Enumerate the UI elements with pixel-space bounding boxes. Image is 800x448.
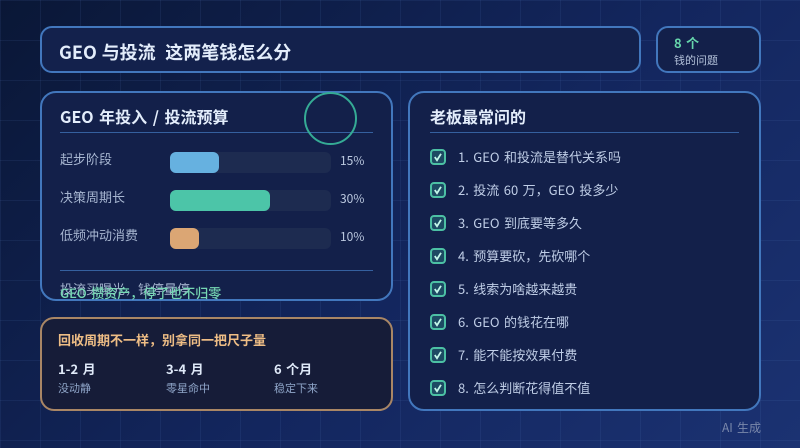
period 3: 6 个月 xyxy=(274,359,312,378)
heading rule xyxy=(430,132,739,133)
question 1: 1. GEO 和投流是替代关系吗 xyxy=(458,147,621,166)
value: 30%: 30% xyxy=(340,190,364,207)
badge: 8 questions: 8 个 xyxy=(674,33,699,52)
question 3: 3. GEO 到底要等多久 xyxy=(458,213,582,232)
period 1: 1-2 月 xyxy=(58,359,96,378)
bar: 15% xyxy=(170,152,331,173)
panel: boss questions xyxy=(408,91,761,411)
divider xyxy=(60,270,373,271)
check 2 xyxy=(430,182,446,198)
check 4 xyxy=(430,248,446,264)
bar label: low frequency: 低频冲动消费 xyxy=(60,225,138,244)
bar label: start: 起步阶段 xyxy=(60,149,112,168)
question 7: 7. 能不能按效果付费 xyxy=(458,345,577,364)
check 6 xyxy=(430,314,446,330)
period 2: 3-4 月 xyxy=(166,359,204,378)
panel: GEO budget xyxy=(40,91,393,301)
AI generated mark: AI 生成 xyxy=(722,419,761,436)
bar: 10% xyxy=(170,228,331,249)
badge: 8 questions xyxy=(656,26,761,73)
period 2 note: 零星命中 xyxy=(166,380,210,396)
badge: 8 questions: 钱的问题 xyxy=(674,52,718,68)
question 4: 4. 预算要砍，先砍哪个 xyxy=(458,246,590,265)
panel heading: GEO 年投入 / 投流预算 xyxy=(60,104,228,128)
question 8: 8. 怎么判断花得值不值 xyxy=(458,378,590,397)
period 3 note: 稳定下来 xyxy=(274,380,318,396)
value: 15%: 15% xyxy=(340,152,364,169)
panel heading: 老板最常问的 xyxy=(430,104,526,128)
question 2: 2. 投流 60 万，GEO 投多少 xyxy=(458,180,618,199)
check 3 xyxy=(430,215,446,231)
check 5 xyxy=(430,281,446,297)
check 7 xyxy=(430,347,446,363)
callout heading: 回收周期不一样，别拿同一把尺子量 xyxy=(58,330,266,349)
heading rule xyxy=(60,132,373,133)
bar: 30% xyxy=(170,190,331,211)
value: 10%: 10% xyxy=(340,228,364,245)
check 1 xyxy=(430,149,446,165)
period 1 note: 没动静 xyxy=(58,380,91,396)
question 6: 6. GEO 的钱花在哪 xyxy=(458,312,569,331)
green note: GEO 攒资产，停了也不归零 xyxy=(60,283,221,302)
header panel: GEO 与投流 这两笔钱怎么分 xyxy=(59,39,291,65)
panel: payback period xyxy=(40,317,393,411)
bar label: long cycle: 决策周期长 xyxy=(60,187,125,206)
header panel xyxy=(40,26,641,73)
question 5: 5. 线索为啥越来越贵 xyxy=(458,279,577,298)
check 8 xyxy=(430,380,446,396)
decorative circle xyxy=(304,92,357,145)
